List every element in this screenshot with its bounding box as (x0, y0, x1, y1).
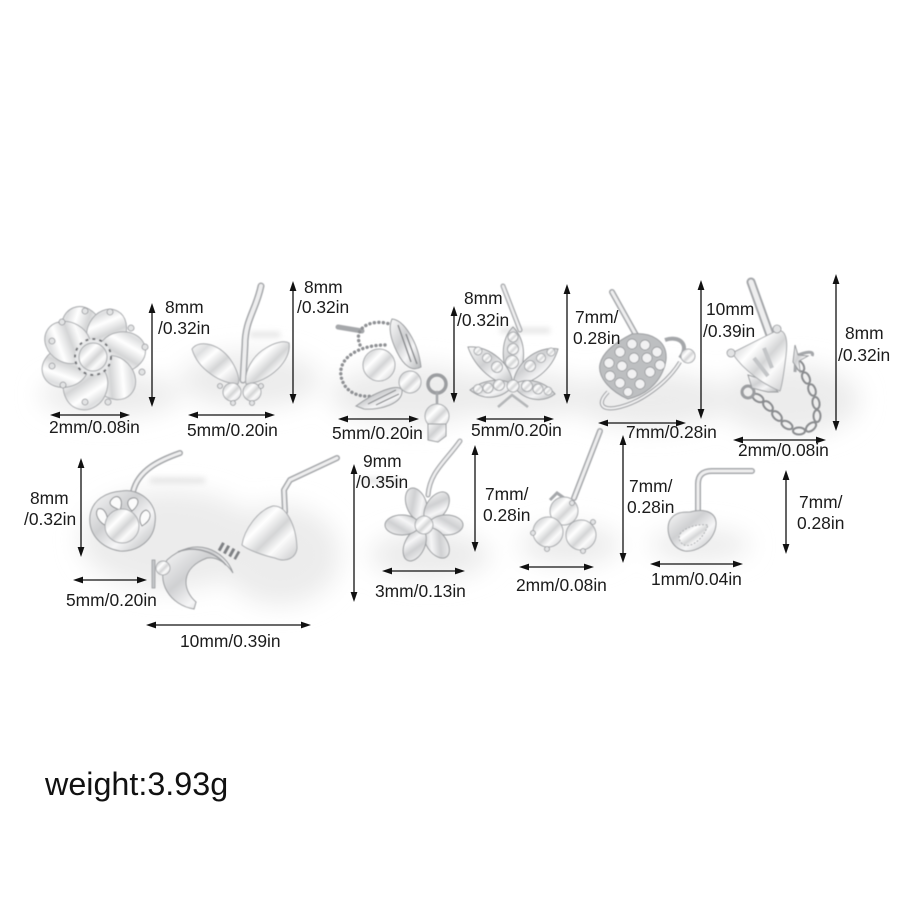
dimension: daisy width 3mm: 3mm/0.13in (375, 581, 466, 601)
dimension: daisy height 7mm (475, 454, 530, 543)
jewelry: cannabis leaf stud (468, 286, 558, 407)
dimension: bee height 8mm (454, 288, 509, 394)
jewelry: crystal flower stud (36, 300, 149, 415)
dimension: bee width 5mm: 5mm/0.20in (332, 423, 423, 443)
dimension: moon height 9mm (354, 451, 408, 593)
dimension: heart flower height 8mm: /0.32in (24, 509, 76, 529)
dimension: planet height 10mm: 10mm (706, 299, 754, 319)
dimension: flower height 8mm: 8mm (165, 297, 204, 317)
dimension: leaf height 7mm (567, 293, 620, 395)
jewelry: bee stud with dangling gem (338, 319, 449, 442)
dimension: flower height 8mm: /0.32in (158, 318, 210, 338)
dimension: butterfly height 8mm: /0.32in (297, 297, 349, 317)
dimension: trio width 2mm: 2mm/0.08in (516, 575, 607, 595)
dimension: trio height 7mm: 7mm/ (629, 476, 673, 496)
dimension: bee height 8mm: 8mm (464, 288, 503, 308)
jewelry: butterfly stud (192, 286, 289, 406)
dimension: flower height 8mm (152, 297, 210, 398)
jewelry: six-petal daisy stud (385, 441, 463, 565)
dimension: butterfly height 8mm (293, 277, 349, 395)
dimension: planet height 10mm: /0.39in (703, 321, 755, 341)
dimension: teardrop height 7mm: 7mm/ (799, 492, 843, 512)
jewelry: heart-cluster flower stud (90, 453, 180, 551)
dimension: heart chain width 2mm: 2mm/0.08in (738, 440, 829, 460)
dimension: leaf height 7mm: 0.28in (573, 328, 620, 348)
dimension: teardrop width 1mm: 1mm/0.04in (651, 569, 742, 589)
weight label: weight:3.93g (44, 766, 228, 802)
dimension: trio height 7mm (623, 444, 674, 554)
dimension: heart chain height 8mm: /0.32in (838, 345, 890, 365)
dimension: butterfly width 5mm: 5mm/0.20in (187, 420, 278, 440)
dimension: moon height 9mm: /0.35in (356, 472, 408, 492)
dimension: daisy height 7mm: 0.28in (483, 505, 530, 525)
dimension: teardrop height 7mm: 0.28in (797, 513, 844, 533)
jewelry: moon and heart gem stud (152, 458, 337, 609)
dimension: planet height 10mm (701, 289, 755, 410)
dimension: heart flower width 5mm (66, 580, 157, 610)
dimension: planet width 7mm: 7mm/0.28in (626, 422, 717, 442)
dimension: bee height 8mm: /0.32in (457, 310, 509, 330)
dimension: daisy width 3mm (375, 571, 466, 601)
dimension: butterfly height 8mm: 8mm (304, 277, 343, 297)
dimension: heart chain height 8mm (836, 283, 890, 422)
dimension: leaf height 7mm: 7mm/ (575, 307, 619, 327)
dimension: teardrop height 7mm (786, 479, 844, 545)
dimension: heart flower width 5mm: 5mm/0.20in (66, 590, 157, 610)
jewelry: three-stone trio stud (530, 431, 600, 554)
dimension: moon height 9mm: 9mm (363, 451, 402, 471)
dimension: heart flower height 8mm: 8mm (30, 488, 69, 508)
dimension: heart chain height 8mm: 8mm (845, 323, 884, 343)
jewelry: heart planet stud (600, 292, 695, 408)
dimension: moon width 10mm: 10mm/0.39in (180, 631, 281, 651)
dimension: trio height 7mm: 0.28in (627, 497, 674, 517)
jewelry: L-bend teardrop stud (668, 471, 752, 551)
dimension: flower width 2mm: 2mm/0.08in (49, 417, 140, 437)
dimension: daisy height 7mm: 7mm/ (485, 484, 529, 504)
dimension: leaf width 5mm: 5mm/0.20in (471, 420, 562, 440)
dimension: heart flower height 8mm (24, 467, 81, 548)
jewelry: heart gem stud with chain (727, 282, 820, 434)
